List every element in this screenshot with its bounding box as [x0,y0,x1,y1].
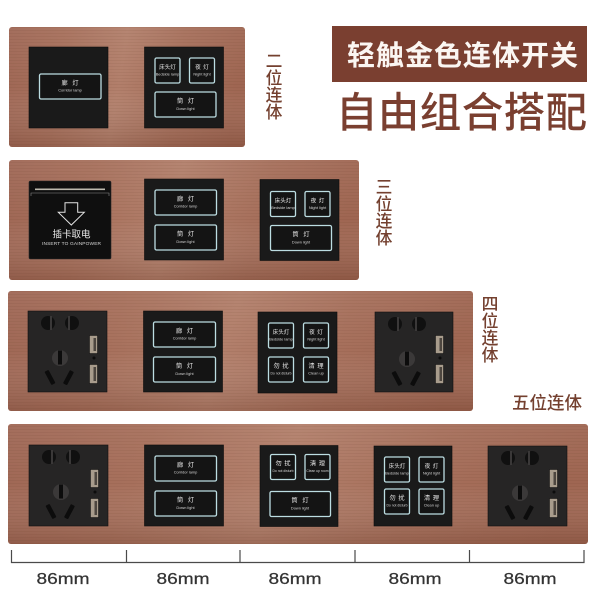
switch: two wide buttons [144,179,224,260]
switch: three buttons: Down light [292,240,311,244]
switch: three buttons: 夜 灯 [311,196,325,204]
label: three-gang: 三 [376,178,392,197]
switch: four buttons: 夜 灯 [309,328,323,336]
switch: two wide buttons: 筒 灯 [177,230,194,238]
switch: three buttons: 筒 灯 [291,496,309,504]
dimension ruler [12,550,584,562]
icon: down arrow [58,203,84,225]
title banner: 轻触金色连体开关 [347,40,578,71]
label: four-gang: 体 [482,346,499,365]
switch: three buttons [260,446,338,526]
card holder: 插卡取电 [52,228,91,240]
switch: three buttons: Clean up room [306,469,329,473]
label: two-gang: 二 [266,52,282,71]
switch: three buttons [260,180,339,260]
panel: five-gang plate [8,424,588,544]
switch: four buttons: Bedside lamp [385,470,409,476]
socket with USB [375,312,453,392]
switch: two wide buttons [144,311,222,392]
switch: three buttons: 勿 扰 [275,460,291,468]
label: three-gang [376,178,393,248]
switch: three buttons: 清 理 [310,460,325,468]
switch: four buttons: 床头灯 [389,462,406,470]
label: five-gang: 五位连体 [512,393,582,413]
switch: three buttons: Night light [193,72,212,76]
switch: two wide buttons: Corridor lamp [174,470,197,474]
dimension labels [36,571,556,588]
dimension labels: 86mm [504,571,556,588]
socket with USB [488,446,567,526]
switch: three buttons: Night light [309,205,327,210]
label: two-gang: 连 [266,86,283,105]
label: two-gang [266,52,283,122]
switch: single wide button [29,47,108,128]
switch: two wide buttons: Down light [175,371,194,376]
switch: two wide buttons: 筒 灯 [177,496,194,504]
dimension labels: 86mm [156,571,210,588]
dimension labels: 86mm [36,571,90,588]
switch: three buttons: 筒 灯 [177,97,194,105]
switch: four buttons: Do not disturb [386,504,408,508]
socket with USB [28,311,107,392]
label: two-gang: 体 [266,103,283,122]
switch: two wide buttons: Corridor lamp [173,336,196,340]
dimension labels: 86mm [268,571,322,588]
panel: two-gang plate [9,27,245,147]
label: four-gang: 位 [482,311,499,331]
switch: two wide buttons: 廊 灯 [177,461,194,469]
panel: three-gang plate [9,160,359,280]
label: three-gang: 位 [376,194,393,214]
switch: three buttons: 筒 灯 [292,230,310,238]
subtitle: 自由组合搭配 [336,89,587,136]
switch: four buttons: 清 理 [424,494,439,502]
label: three-gang: 体 [376,229,393,248]
switch: three buttons: 床头灯 [159,63,176,71]
switch: two wide buttons: 廊 灯 [176,327,193,335]
switch: two wide buttons: 廊 灯 [177,195,194,203]
switch: two wide buttons: Corridor lamp [174,204,197,208]
switch: three buttons: Down light [291,506,310,510]
card holder: INSERT TO GAINPOWER [42,241,102,247]
label: two-gang: 位 [266,68,283,88]
switch: four buttons: Clean up [424,502,439,508]
switch: three buttons: 床头灯 [275,196,292,204]
switch: four buttons: Bedside lamp [269,336,293,342]
dimension labels: 86mm [388,571,442,588]
switch: four buttons: Night light [307,336,326,342]
label: three-gang: 连 [376,212,393,231]
switch: four buttons: 夜 灯 [425,462,439,470]
switch: three buttons: Down light [176,106,195,111]
switch: single wide button: 廊 灯 [61,79,79,87]
switch: four buttons: 勿 扰 [389,494,405,502]
switch: four buttons: 清 理 [308,362,324,370]
card holder [29,181,111,259]
switch: four buttons: Night light [423,470,441,476]
switch: four buttons [374,446,452,526]
switch: two wide buttons: Down light [176,505,195,510]
switch: two wide buttons: Down light [176,239,195,244]
switch: four buttons: Clean up [308,370,324,376]
switch: three buttons: Do not disturb [272,469,294,473]
switch: two wide buttons: 筒 灯 [176,362,193,370]
switch: two wide buttons [144,445,224,526]
switch: four buttons: Do not disturb [270,372,292,376]
switch: three buttons: 夜 灯 [195,63,209,71]
label: four-gang: 四 [482,295,498,314]
switch: three buttons: Bedside lamp [271,205,295,210]
switch: three buttons: Bedside lamp [156,72,179,76]
title banner [332,26,587,82]
socket with USB [29,445,108,526]
label: four-gang [482,295,499,365]
switch: four buttons [258,312,337,393]
label: four-gang: 连 [482,329,499,348]
switch: three buttons [144,47,224,128]
switch: four buttons: 床头灯 [273,328,290,336]
switch: four buttons: 勿 扰 [273,362,289,370]
switch: single wide button: Corridor lamp [58,88,82,92]
panel: four-gang plate [8,291,473,411]
